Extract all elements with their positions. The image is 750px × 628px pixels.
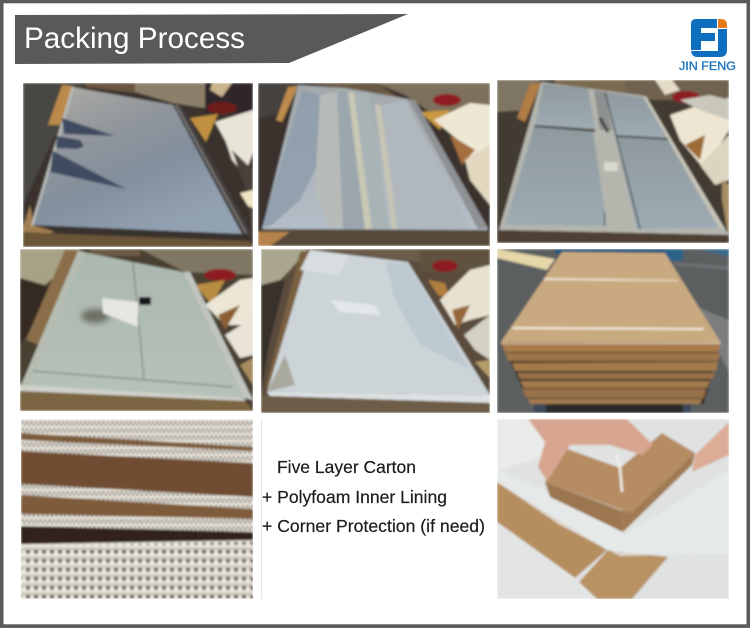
title banner — [15, 14, 408, 64]
title banner: Packing Process — [24, 22, 245, 55]
photo: door with packing list — [20, 249, 253, 411]
photo: corner protection carton with hands — [497, 419, 729, 599]
photo: door with two panels and strip — [497, 80, 729, 243]
logo: Jin Feng: JIN FENG — [679, 59, 736, 73]
material: corner protection: + Corner Protection (if need) — [262, 516, 485, 536]
photo: corrugated carton layers — [21, 419, 253, 599]
text block: packing materials — [262, 457, 485, 536]
photo: door covered with polyfoam — [261, 249, 490, 413]
photo: bare door panel with shadows — [23, 83, 253, 247]
material: polyfoam inner lining: + Polyfoam Inner Lining — [262, 487, 447, 507]
logo: Jin Feng — [679, 19, 736, 73]
divider line — [260, 419, 262, 599]
material: five layer carton: Five Layer Carton — [277, 457, 416, 477]
photo: door wrapped in film — [258, 83, 490, 246]
photo: stack of cartons — [497, 249, 729, 413]
